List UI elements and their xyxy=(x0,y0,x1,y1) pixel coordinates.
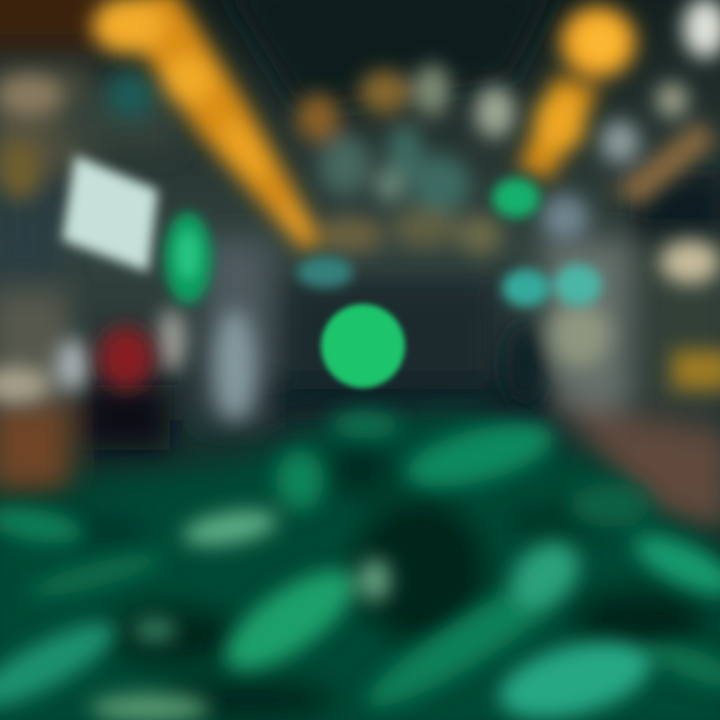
green light right xyxy=(492,178,540,218)
green sign left xyxy=(164,212,212,304)
green circle centre xyxy=(321,304,405,388)
red figure left xyxy=(98,326,154,390)
central shelving cluster xyxy=(0,0,720,420)
amber ceiling light right xyxy=(518,6,636,180)
green foreground pile base xyxy=(0,410,720,720)
background: dark ceiling and walls xyxy=(0,0,720,530)
green leaf highlights xyxy=(0,410,720,720)
amber ceiling light left xyxy=(92,0,322,252)
teal signs right xyxy=(297,256,602,307)
white panel left xyxy=(62,155,158,272)
